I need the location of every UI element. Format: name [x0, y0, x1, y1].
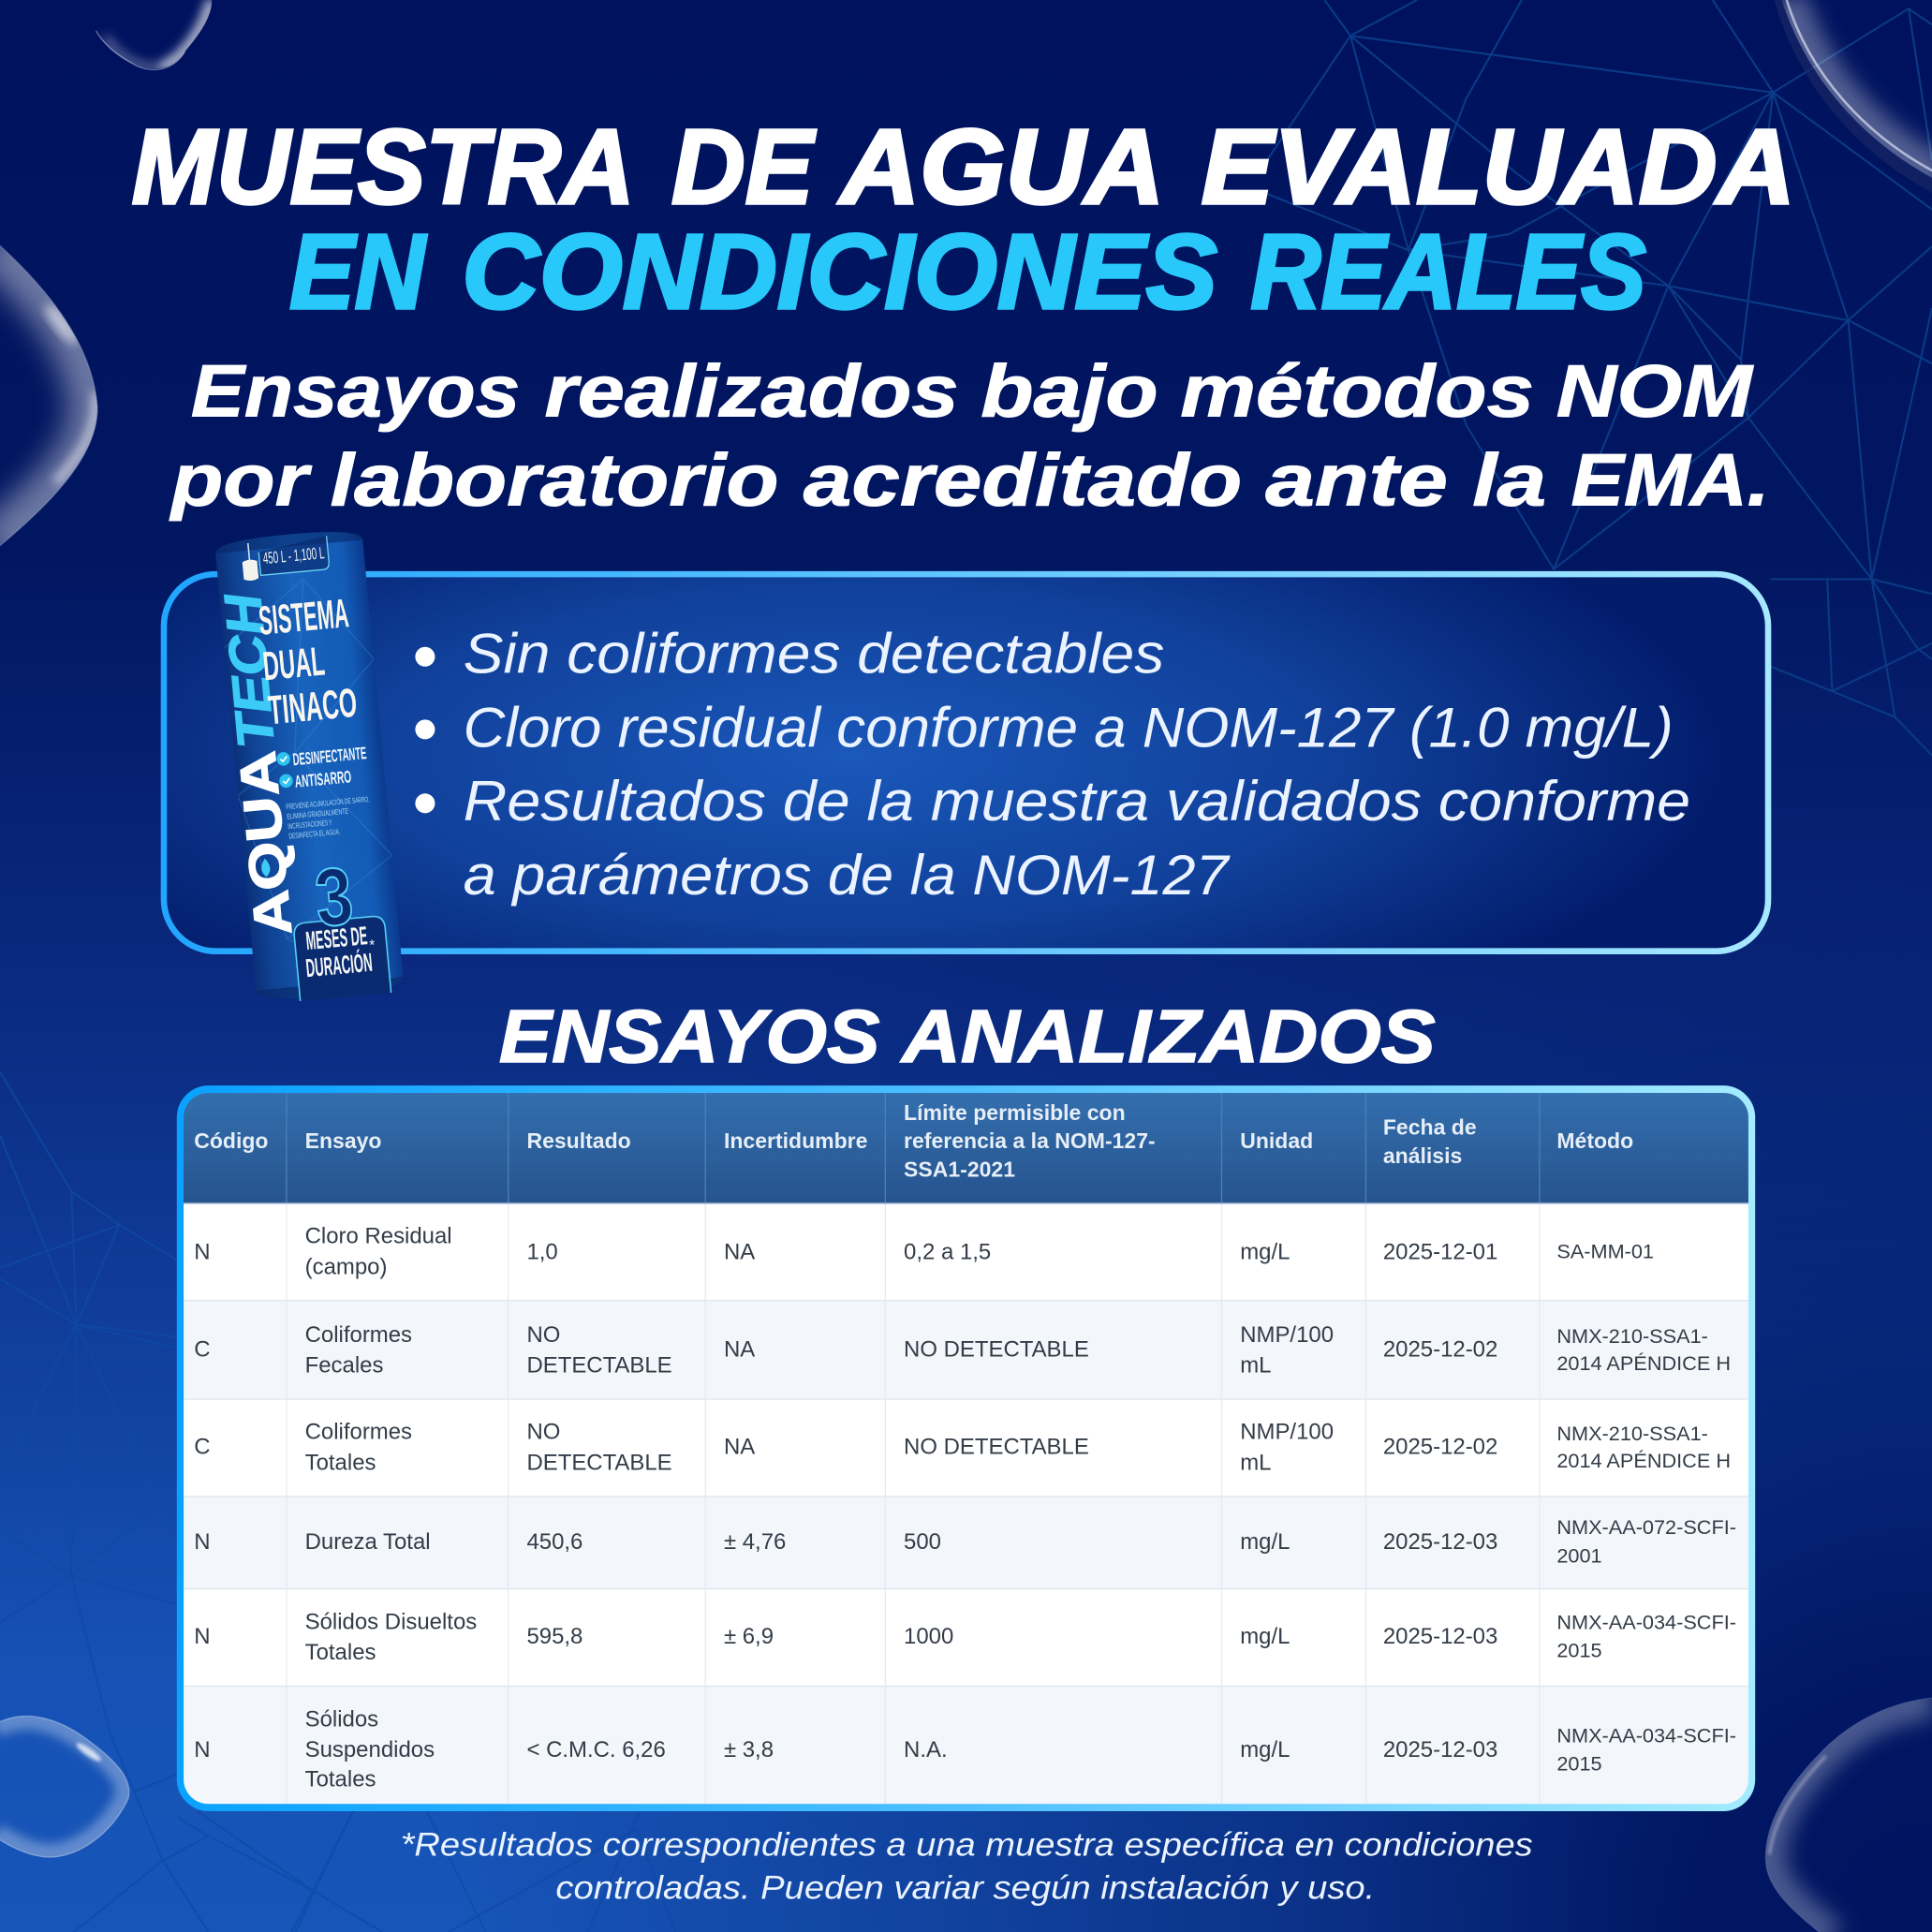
row: coliformes totales: NMP/100	[1240, 1420, 1334, 1445]
row: dureza total	[196, 1521, 1735, 1562]
row: solidos suspendidos: Suspendidos	[305, 1737, 435, 1762]
capacity label: 450 L - 1,100 L	[262, 543, 325, 568]
row: cloro residual: N	[194, 1240, 211, 1265]
row: solidos disueltos: N	[194, 1624, 211, 1649]
row: coliformes fecales: DETECTABLE	[526, 1353, 672, 1379]
description: INCRUSTACIONES Y	[288, 819, 332, 831]
product name: DUAL	[261, 639, 327, 689]
bullet list: a parámetros de la NOM-127	[464, 843, 1231, 907]
row: solidos suspendidos: < C.M.C. 6,26	[526, 1737, 666, 1762]
panel: key results	[164, 574, 1768, 951]
subtitle: Ensayos	[191, 350, 520, 433]
row: coliformes fecales: NO	[526, 1322, 560, 1348]
row: solidos disueltos: mg/L	[1240, 1624, 1290, 1649]
row: solidos suspendidos: N	[194, 1737, 211, 1762]
duration badge: MESES DE	[304, 921, 369, 955]
row: coliformes totales: NO DETECTABLE	[904, 1435, 1089, 1460]
row: solidos suspendidos: Sólidos	[305, 1706, 378, 1732]
row: coliformes fecales: NO DETECTABLE	[904, 1337, 1089, 1363]
row: solidos disueltos: Sólidos Disueltos	[305, 1609, 477, 1634]
table header: Código	[194, 1128, 268, 1153]
product name: SISTEMA	[257, 591, 350, 644]
capacity label	[258, 536, 330, 575]
subtitle: EMA.	[1571, 438, 1769, 521]
subtitle: métodos	[1180, 350, 1534, 433]
row: solidos disueltos: 2025-12-03	[1383, 1624, 1497, 1649]
row: coliformes totales: C	[194, 1435, 211, 1460]
subtitle: NOM	[1556, 350, 1754, 433]
droplet: top left	[96, 0, 212, 69]
brand name: TECH	[214, 591, 286, 750]
subtitle	[170, 350, 1769, 521]
table header: Incertidumbre	[724, 1128, 868, 1153]
row: coliformes totales: mL	[1240, 1451, 1272, 1476]
subtitle: por	[170, 438, 313, 521]
row: dureza total: NMX-AA-072-SCFI-	[1556, 1515, 1736, 1539]
title	[132, 108, 1795, 331]
row: solidos suspendidos: mg/L	[1240, 1737, 1290, 1762]
row: coliformes fecales: NA	[724, 1337, 755, 1363]
row: solidos disueltos: 1000	[904, 1624, 953, 1649]
title: EVALUADA	[1202, 108, 1795, 226]
row: coliformes totales: Coliformes	[305, 1420, 412, 1445]
row: dureza total: N	[194, 1529, 211, 1555]
results table	[181, 1089, 1751, 1807]
table header: Ensayo	[305, 1128, 382, 1153]
droplet: bottom left	[0, 1716, 129, 1857]
row: solidos suspendidos: N.A.	[904, 1737, 948, 1762]
row: solidos disueltos: Totales	[305, 1640, 376, 1665]
row: solidos suspendidos: 2025-12-03	[1383, 1737, 1497, 1762]
footnote	[401, 1825, 1533, 1906]
bullet list: Cloro residual conforme a NOM-127 (1.0 mg/L)	[464, 695, 1674, 759]
subtitle: bajo	[981, 350, 1158, 433]
description	[286, 794, 373, 841]
row: cloro residual: (campo)	[305, 1254, 387, 1279]
row: cloro residual	[194, 1224, 1654, 1279]
row: cloro residual: 0,2 a 1,5	[904, 1240, 991, 1265]
row: cloro residual: NA	[724, 1240, 755, 1265]
table header	[184, 1093, 1748, 1203]
brand name: AQUA	[228, 749, 302, 938]
description: PREVIENE ACUMULACIÓN DE SARRO,	[286, 794, 370, 811]
subtitle: la	[1472, 438, 1546, 521]
section heading: ANALIZADOS	[900, 995, 1436, 1079]
row: coliformes fecales: 2025-12-02	[1383, 1337, 1497, 1363]
row: solidos disueltos	[196, 1613, 1735, 1659]
row: coliformes totales: NMX-210-SSA1-	[1556, 1422, 1708, 1445]
row: coliformes totales: NO	[526, 1420, 560, 1445]
table header: Límite permisible con	[904, 1100, 1126, 1125]
row: solidos suspendidos: 2015	[1556, 1752, 1602, 1776]
row: dureza total: Dureza Total	[305, 1529, 431, 1555]
row: coliformes fecales: 2014 APÉNDICE H	[1556, 1351, 1731, 1375]
row: cloro residual: 2025-12-01	[1383, 1240, 1497, 1265]
icon: tank	[241, 542, 258, 582]
table header: SSA1-2021	[904, 1157, 1015, 1181]
row: solidos suspendidos: ± 3,8	[724, 1737, 774, 1762]
row: solidos suspendidos: NMX-AA-034-SCFI-	[1556, 1723, 1736, 1747]
subtitle: laboratorio	[331, 438, 779, 521]
row: coliformes totales: 2025-12-02	[1383, 1435, 1497, 1460]
bullet list	[415, 621, 1690, 907]
row: solidos disueltos: 595,8	[526, 1624, 583, 1649]
description: ELIMINA GRADUALMENTE	[287, 807, 349, 821]
table header: referencia a la NOM-127-	[904, 1128, 1156, 1153]
row: dureza total: 2025-12-03	[1383, 1529, 1497, 1555]
bullet list: Sin coliformes detectables	[464, 621, 1164, 685]
row: coliformes fecales: NMX-210-SSA1-	[1556, 1324, 1708, 1348]
subtitle: ante	[1265, 438, 1448, 521]
row: dureza total: 2001	[1556, 1543, 1602, 1567]
duration badge: *	[369, 937, 376, 954]
row: cloro residual: SA-MM-01	[1556, 1239, 1654, 1262]
row: dureza total: 450,6	[526, 1529, 583, 1555]
title: MUESTRA	[132, 108, 635, 226]
section heading: ENSAYOS	[499, 995, 879, 1079]
row: cloro residual: 1,0	[526, 1240, 558, 1265]
row: solidos suspendidos	[196, 1710, 1735, 1787]
features: DESINFECTANTE	[292, 743, 367, 769]
table header: análisis	[1383, 1143, 1462, 1168]
row: solidos disueltos: NMX-AA-034-SCFI-	[1556, 1610, 1736, 1633]
table header: Resultado	[526, 1128, 631, 1153]
features: ANTISARRO	[294, 766, 352, 791]
row: cloro residual: mg/L	[1240, 1240, 1290, 1265]
row: coliformes totales	[195, 1423, 1729, 1470]
row: coliformes totales: NA	[724, 1435, 755, 1460]
duration badge	[287, 848, 391, 1001]
brand name	[214, 591, 302, 938]
droplet: bottom right	[1765, 1698, 1932, 1932]
title: CONDICIONES	[462, 213, 1217, 331]
subtitle: acreditado	[804, 438, 1242, 521]
row: coliformes fecales	[195, 1326, 1729, 1373]
row: coliformes fecales: Coliformes	[305, 1322, 412, 1348]
row: coliformes fecales: C	[194, 1337, 211, 1363]
row: solidos disueltos: 2015	[1556, 1639, 1602, 1662]
row: dureza total: mg/L	[1240, 1529, 1290, 1555]
row: solidos disueltos: ± 6,9	[724, 1624, 774, 1649]
row: coliformes totales: 2014 APÉNDICE H	[1556, 1449, 1731, 1472]
table header: Unidad	[1240, 1128, 1313, 1153]
row: coliformes fecales: mL	[1240, 1353, 1272, 1379]
table header: Fecha de	[1383, 1115, 1477, 1140]
droplet: left	[0, 241, 97, 551]
row: solidos suspendidos: Totales	[305, 1767, 376, 1792]
title: REALES	[1250, 213, 1646, 331]
product name: TINACO	[266, 681, 359, 733]
row: coliformes totales: Totales	[305, 1451, 376, 1476]
droplet: top right	[1775, 0, 1932, 198]
bullet list: Resultados de la muestra validados conforme	[464, 769, 1690, 833]
row: cloro residual: Cloro Residual	[305, 1224, 452, 1249]
table header: Método	[1556, 1128, 1633, 1153]
section heading	[499, 995, 1436, 1079]
row: coliformes fecales: Fecales	[305, 1353, 383, 1379]
product bottle	[207, 527, 409, 1006]
title: AGUA	[837, 108, 1164, 226]
duration badge: DURACIÓN	[304, 948, 374, 982]
title: EN	[289, 213, 427, 331]
footnote: controladas. Pueden variar según instalación y uso.	[555, 1868, 1375, 1906]
product name	[257, 591, 359, 733]
duration badge: 3	[312, 850, 357, 944]
row: coliformes fecales: NMP/100	[1240, 1322, 1334, 1348]
subtitle: realizados	[545, 350, 959, 433]
description: DESINFECTA EL AGUA.	[288, 828, 341, 841]
title: DE	[671, 108, 817, 226]
row: dureza total: 500	[904, 1529, 941, 1555]
row: coliformes totales: DETECTABLE	[526, 1451, 672, 1476]
footnote: *Resultados correspondientes a una muestra específica en condiciones	[401, 1825, 1533, 1863]
row: dureza total: ± 4,76	[724, 1529, 786, 1555]
features	[276, 743, 369, 792]
